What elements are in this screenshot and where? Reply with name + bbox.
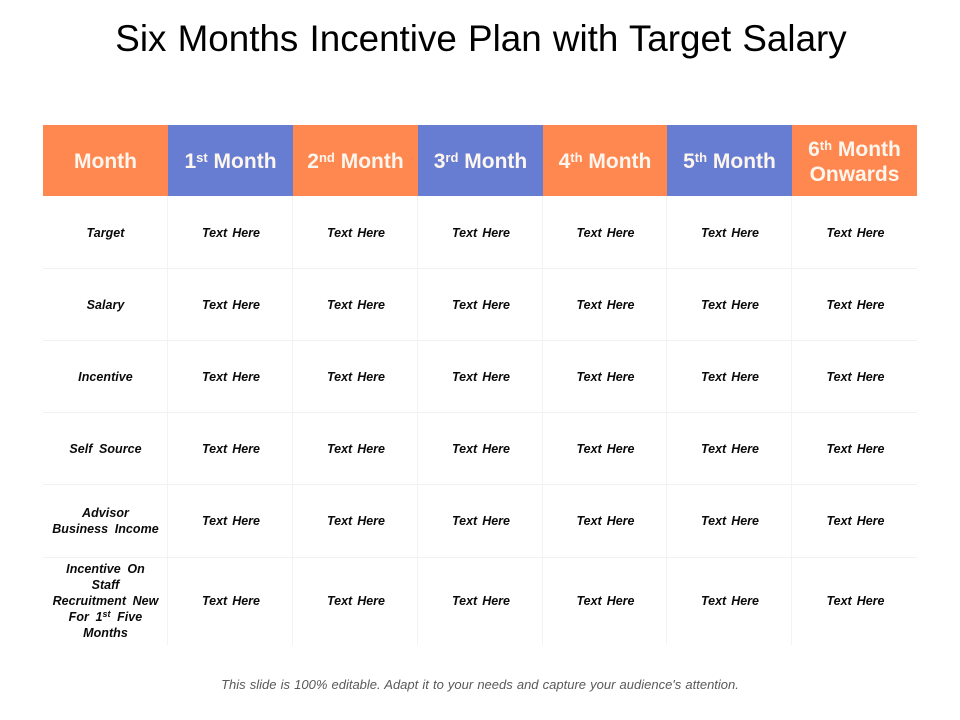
row: Incentive On Staff Recruitment New For 1st Five Months: Recruitment New: [53, 594, 158, 608]
row: Incentive: Text Here: [202, 370, 260, 384]
row: Salary: Text Here: [202, 298, 260, 312]
header: Month: Month: [74, 150, 137, 173]
row: Advisor Business Income: Text Here: [452, 514, 510, 528]
row: Target: Text Here: [452, 226, 510, 240]
row: Incentive On Staff Recruitment New For 1st Five Months: Text Here: [826, 594, 884, 608]
row: Self Source: Text Here: [327, 442, 385, 456]
row: Incentive On Staff Recruitment New For 1st Five Months: Staff: [92, 578, 119, 592]
incentive plan table: [43, 125, 917, 645]
row: Incentive On Staff Recruitment New For 1st Five Months: Text Here: [701, 594, 759, 608]
row: Incentive: Text Here: [701, 370, 759, 384]
header: 6th Month Onwards: [792, 125, 917, 196]
header: 3rd Month: 3rd Month: [434, 150, 527, 173]
header: 6th Month Onwards: Onwards: [810, 162, 899, 186]
row: Incentive On Staff Recruitment New For 1st Five Months: Text Here: [452, 594, 510, 608]
header: 2nd Month: 2nd Month: [307, 150, 404, 173]
row: Incentive: Text Here: [826, 370, 884, 384]
row: Self Source: Text Here: [576, 442, 634, 456]
header: 5th Month: 5th Month: [683, 150, 776, 173]
header: 6th Month Onwards: 6th Month: [808, 138, 901, 160]
row: Self Source: Text Here: [452, 442, 510, 456]
row: Incentive On Staff Recruitment New For 1st Five Months: Incentive On: [66, 562, 145, 576]
header: 3rd Month: [418, 125, 543, 196]
row: Advisor Business Income: [43, 485, 917, 558]
row: Salary: Salary: [87, 298, 124, 312]
row: Self Source: Text Here: [701, 442, 759, 456]
header: 2nd Month: [293, 125, 418, 196]
title: Six Months Incentive Plan with Target Salary: [115, 18, 847, 59]
row: Advisor Business Income: Advisor: [82, 506, 129, 520]
row: Advisor Business Income: Text Here: [327, 514, 385, 528]
row: Advisor Business Income: Text Here: [701, 514, 759, 528]
header: 1st Month: 1st Month: [184, 150, 277, 173]
table header row: [43, 125, 917, 196]
row: Salary: Text Here: [452, 298, 510, 312]
row: Incentive On Staff Recruitment New For 1st Five Months: Months: [83, 626, 128, 640]
header: 4th Month: [543, 125, 667, 196]
row: Salary: Text Here: [576, 298, 634, 312]
header: 5th Month: [667, 125, 792, 196]
header: 1st Month: [168, 125, 293, 196]
row: Incentive: Incentive: [78, 370, 133, 384]
row: Target: Text Here: [202, 226, 260, 240]
row: Self Source: Text Here: [202, 442, 260, 456]
header: Month: [43, 125, 168, 196]
row: Target: Text Here: [576, 226, 634, 240]
row: Incentive On Staff Recruitment New For 1st Five Months: For 1st Five: [69, 609, 142, 624]
row: Salary: Text Here: [701, 298, 759, 312]
row: Incentive: Text Here: [576, 370, 634, 384]
row: Salary: Text Here: [327, 298, 385, 312]
row: Target: [43, 196, 917, 269]
row: Target: Target: [86, 226, 125, 240]
row: Incentive On Staff Recruitment New For 1st Five Months: [52, 558, 884, 645]
row: Salary: Text Here: [826, 298, 884, 312]
row: Self Source: Self Source: [69, 442, 142, 456]
row: Advisor Business Income: Text Here: [202, 514, 260, 528]
row: Advisor Business Income: Text Here: [826, 514, 884, 528]
row: Incentive On Staff Recruitment New For 1st Five Months: Text Here: [327, 594, 385, 608]
row: Target: Text Here: [701, 226, 759, 240]
row: Incentive: Text Here: [452, 370, 510, 384]
row: Salary: [43, 269, 917, 341]
row: Incentive: [43, 341, 917, 413]
row: Self Source: [43, 413, 917, 485]
header: 4th Month: 4th Month: [559, 150, 651, 173]
row: Incentive On Staff Recruitment New For 1st Five Months: Text Here: [576, 594, 634, 608]
row: Advisor Business Income: Business Income: [52, 522, 159, 536]
row: Advisor Business Income: Text Here: [576, 514, 634, 528]
row: Incentive On Staff Recruitment New For 1st Five Months: Text Here: [202, 594, 260, 608]
row: Target: Text Here: [327, 226, 385, 240]
row: Incentive: Text Here: [327, 370, 385, 384]
footer note: This slide is 100% editable. Adapt it to your needs and capture your audience's attention.: [221, 677, 739, 692]
row: Target: Text Here: [826, 226, 884, 240]
row: Self Source: Text Here: [826, 442, 884, 456]
